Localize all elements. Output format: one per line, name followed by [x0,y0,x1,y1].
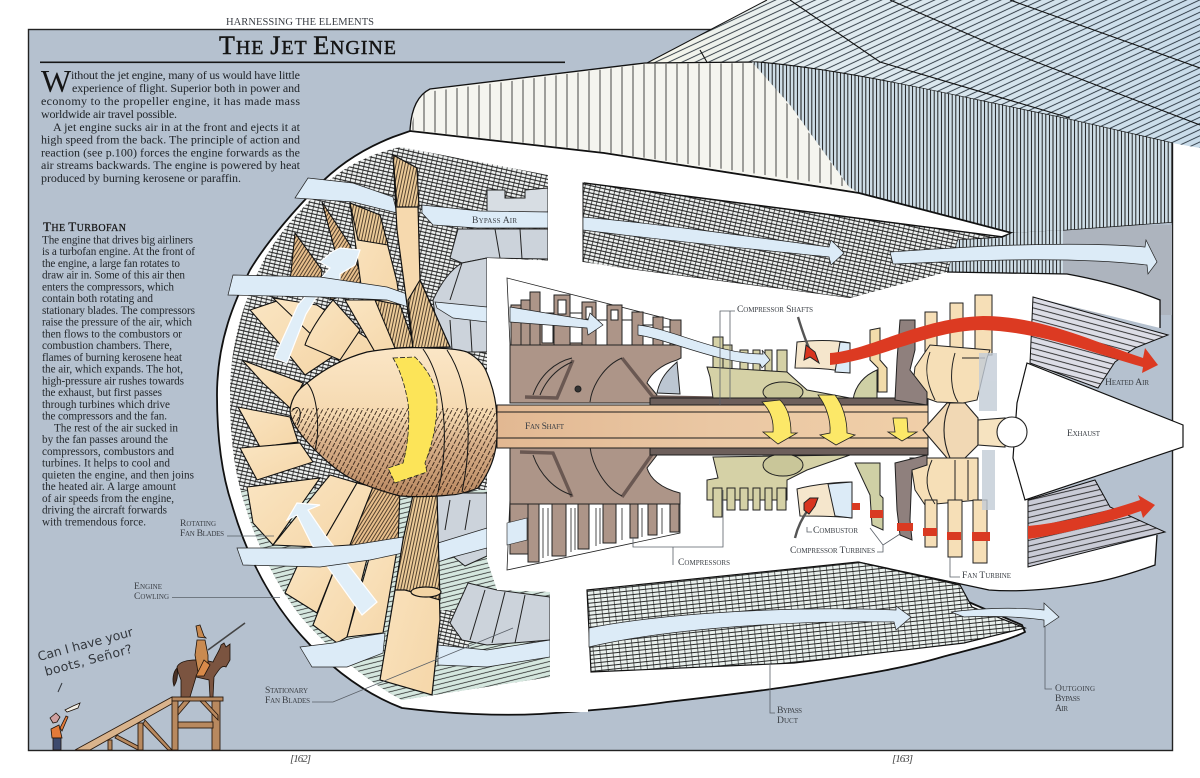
intro text: W [41,63,72,99]
lower stator panels [437,493,550,645]
label: engine cowling [134,581,169,602]
upper bypass duct mesh [583,183,1002,298]
turbofan text: the heated air. A large amount [42,481,177,493]
cartoon: handwritten speech: boots, Señor? [43,641,134,679]
intro text: worldwide air travel possible. [41,107,177,121]
panel: grey pylon block [1063,225,1172,315]
turbofan text: through turbines which drive [42,399,170,411]
page number 163: [163] [892,753,913,765]
air streams passing the fan [228,178,550,667]
label: stationary fan blades: Fan Blades [265,695,310,706]
pylon hatching [947,230,1063,276]
label: engine cowling: Cowling [134,591,169,602]
label: bypass duct [777,705,802,726]
intro text: reaction (see p.100) forces the engine forwards as the [41,146,300,160]
turbofan text: the compressors and the fan. [42,411,167,423]
label: rotating fan blades: Fan Blades [180,528,224,539]
intro text: experience of flight. Superior both in power and [72,81,300,95]
turbofan text: is a turbofan engine. At the front of [42,246,195,258]
label: exhaust: Exhaust [1067,428,1101,439]
label: rotating fan blades: Rotating [180,518,216,529]
turbofan text: of air speeds from the engine, [42,493,174,505]
title rule [40,62,565,63]
red marks on turbine [852,503,990,541]
hot air arrow: top [830,316,1158,373]
leader lines [172,311,1052,713]
upper stator panels [433,188,548,352]
turbofan text: the air, which expands. The hot, [42,364,183,376]
heated air duct: bottom [1028,480,1165,567]
bypass air arrows [583,217,1157,647]
cartoon: small man waving boots [50,703,80,750]
label: rotating fan blades [180,518,224,539]
turbofan text: driving the aircraft forwards [42,505,167,517]
label: bypass air: Bypass Air [472,215,517,226]
cartoon: handwritten speech [36,624,135,692]
fan shaft [497,398,928,455]
label: outgoing bypass air: Outgoing [1055,683,1095,694]
intro text: A jet engine sucks air in at the front and ejects it at [53,120,301,134]
air arrow: into compressor lower [507,518,527,545]
turbofan text: enters the compressors, which [42,282,174,294]
label: bypass duct: Bypass [777,705,802,716]
label: fan shaft: Fan Shaft [525,421,565,432]
intro text: air streams backwards. The engine is powered by heat [41,158,301,172]
nose spinner [285,348,500,500]
panel: high-pressure compressor, top [707,328,887,402]
label: outgoing bypass air [1055,683,1095,714]
intro text: economy to the propeller engine, it has made mass [41,94,300,108]
intro text: high speed from the back. The principle of action and [41,132,300,146]
rotation arrow: spinner [388,357,437,483]
turbofan text: then flows to the combustors or [42,328,182,340]
label: engine cowling: Engine [134,581,162,592]
engine cowling: white outer casing [217,131,1025,715]
label: compressors: Compressors [678,557,730,568]
label: outgoing bypass air: Air [1055,703,1068,714]
panel: high-pressure compressor, bottom [707,454,883,530]
rotation arrow: shaft three [888,418,917,441]
intro text [41,63,301,185]
turbofan text: The rest of the air sucked in [54,422,178,434]
exhaust cone [1013,363,1183,500]
cartoon: handwritten speech: Can I have your [36,624,135,664]
label: stationary fan blades [265,685,310,706]
turbofan text: quieten the engine, and then joins [42,470,194,482]
turbofan text: The engine that drives big airliners [42,234,193,246]
label: heated air: Heated Air [1105,377,1149,388]
combustor: bottom [795,482,852,538]
turbofan text: compressors, combustors and [42,446,174,458]
air flow arrow: lower inside fan [287,503,377,615]
turbofan text: stationary blades. The compressors [42,305,195,317]
panel: low-pressure compressor, bottom [507,447,767,570]
compressor air arrow second [638,325,770,368]
label: bypass duct: Duct [777,715,799,726]
intro text: ithout the jet engine, many of us would have little [71,68,300,82]
turbofan text: high-pressure air rushes towards [42,376,184,388]
turbofan text: contain both rotating and [42,293,153,305]
turbofan text: turbines. It helps to cool and [42,458,170,470]
cartoon: horse and rider with lance [173,623,245,697]
rotation arrow: shaft one [762,400,797,444]
turbofan text: with tremendous force. [42,516,146,528]
fan chamber mesh [225,147,555,705]
engine core white body [487,258,1183,592]
turbine section tan [910,295,992,563]
label: compressor shafts: Compressor Shafts [737,304,813,315]
label: compressor turbines: Compressor Turbines [790,545,875,556]
central stationary fan blade [380,155,450,695]
heading: the turbofan: THE TURBOFAN [43,219,126,234]
turbofan text: flames of burning kerosene heat [42,352,183,364]
turbofan text: by the fan passes around the [42,434,168,446]
label: fan turbine: Fan Turbine [962,570,1011,581]
strut whites [548,170,588,712]
turbofan text: combustion chambers. There, [42,340,172,352]
turbine shaded strip [979,353,997,510]
wing [647,0,1200,148]
turbofan text: raise the pressure of the air, which [42,317,192,329]
turbofan text: the engine, a large fan rotates to [42,258,180,270]
label: combustor: Combustor [813,525,858,536]
rotating fan blades [238,202,415,643]
cartoon: wooden ramp and platform [75,697,223,750]
running header: HARNESSING THE ELEMENTS [226,17,374,28]
combustor: top [795,317,850,373]
turbofan text: the exhaust, but first passes [42,387,162,399]
panel: low-pressure compressor, top [507,278,767,403]
rotation arrow: shaft two [818,395,855,445]
page number 162: [162] [290,753,311,765]
lower bypass duct mesh [587,562,1025,672]
intro text: produced by burning kerosene or paraffin. [41,171,241,185]
label: outgoing bypass air: Bypass [1055,693,1080,704]
label: stationary fan blades: Stationary [265,685,308,696]
title: THE JET ENGINE [219,31,396,60]
hot air arrow: bottom [1028,495,1155,539]
nacelle with hatching [410,62,1172,233]
hub disc and cone [923,403,1027,458]
air flow arrow: upper inside fan [274,248,360,363]
dark turbine drive arms [895,320,927,540]
heated air duct: top [1030,297,1168,388]
turbofan text [42,234,195,528]
compressor air arrow [510,307,603,335]
turbofan text: draw air in. Some of this air then [42,270,185,282]
